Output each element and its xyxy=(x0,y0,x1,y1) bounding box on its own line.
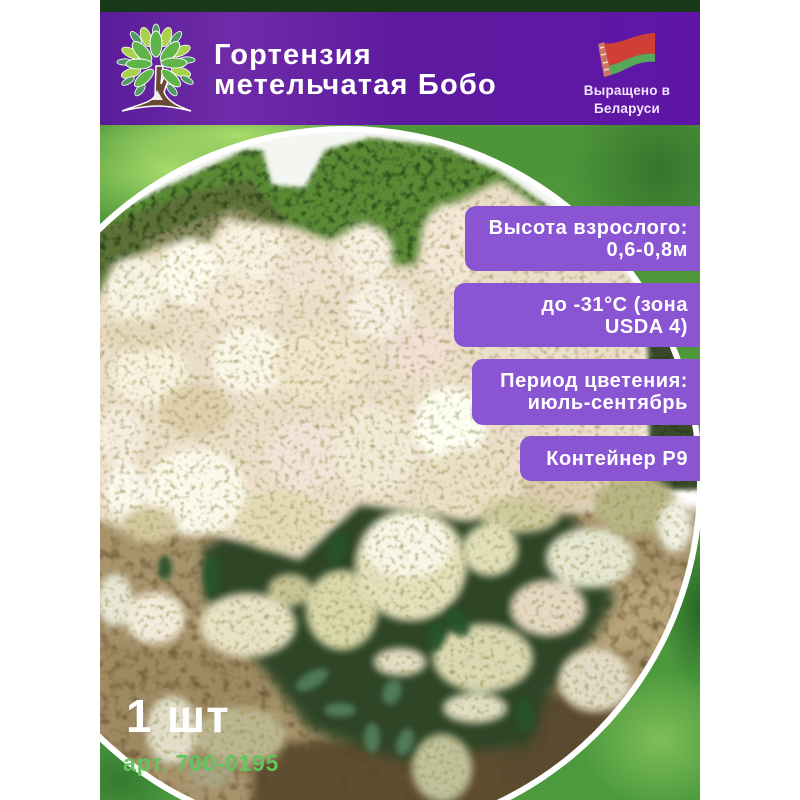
caption: grown in Belarus: Беларуси xyxy=(594,101,660,116)
title: Гортензия xyxy=(214,39,372,71)
icon: Belarus flag xyxy=(598,33,655,77)
title: метельчатая Бобо xyxy=(214,69,497,101)
dark leaf mass xyxy=(205,490,615,760)
circular hydrangea photo xyxy=(80,125,720,800)
header band xyxy=(100,12,700,125)
info pill: flowering period: Период цветения: xyxy=(500,370,688,392)
info pill: hardiness: до -31°C (зона xyxy=(541,294,688,316)
info pill: hardiness: USDA 4) xyxy=(605,316,688,338)
info pill: height: 0,6-0,8м xyxy=(607,239,688,261)
quantity label: 1 шт xyxy=(126,690,230,742)
info pill: flowering period xyxy=(472,359,700,425)
large round flower head xyxy=(355,509,467,621)
caption: grown in Belarus: Выращено в xyxy=(584,83,670,98)
cream blossom mass xyxy=(90,180,692,800)
sky xyxy=(140,132,561,206)
info pill: hardiness xyxy=(454,283,700,347)
icon: tree logo xyxy=(117,24,195,111)
dark leaves xyxy=(158,528,534,732)
info pill: flowering period: июль-сентябрь xyxy=(528,392,688,414)
title xyxy=(214,39,497,101)
info pill: container: Контейнер Р9 xyxy=(546,448,688,470)
info pill: container xyxy=(520,436,700,481)
trees xyxy=(90,138,705,490)
pale leaves xyxy=(292,664,417,758)
white circle frame xyxy=(100,126,700,800)
ground xyxy=(80,510,720,800)
caption: grown in Belarus xyxy=(584,83,670,116)
article number: арт. 700-0195 xyxy=(123,750,279,776)
info pill: height xyxy=(465,206,700,271)
green blurred background panel xyxy=(100,0,700,800)
info pill: height: Высота взрослого: xyxy=(489,217,688,239)
